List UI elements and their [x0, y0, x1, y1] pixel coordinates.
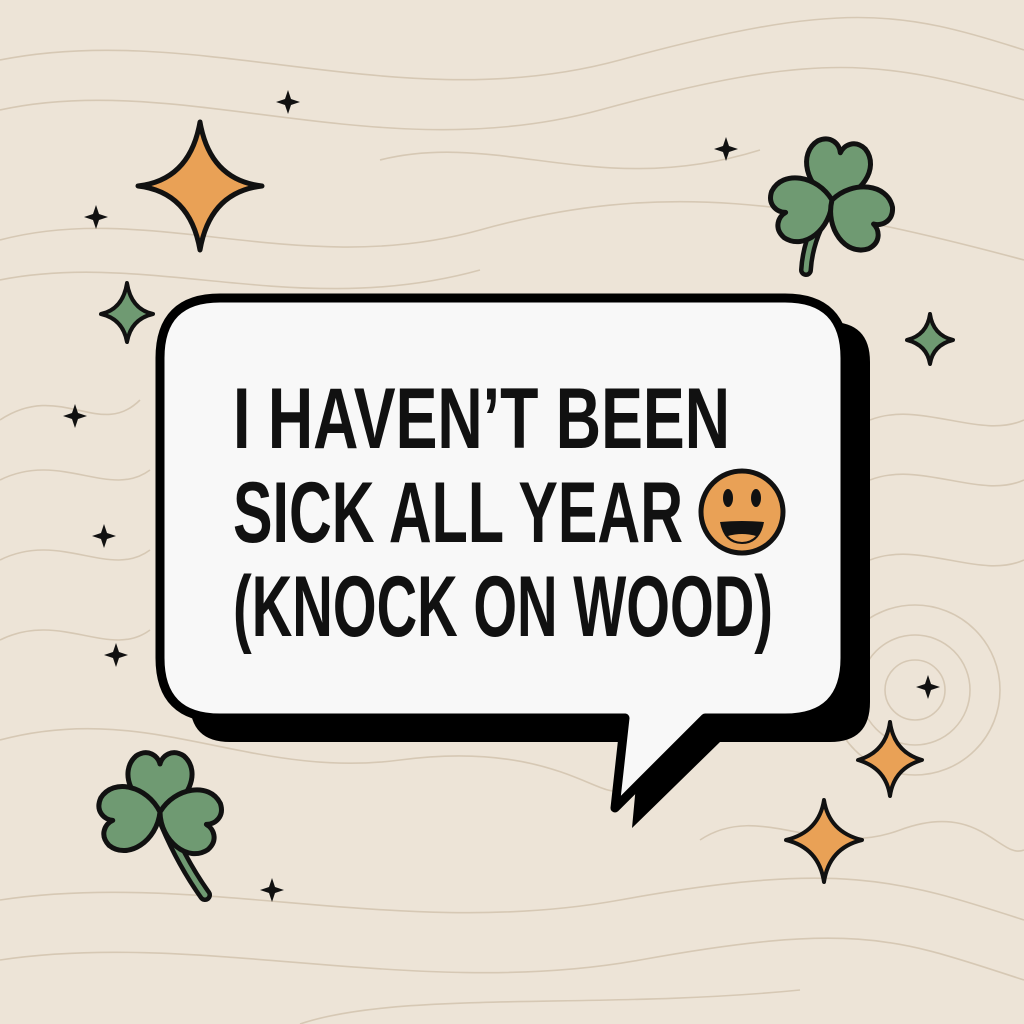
speech bubble: [160, 298, 870, 828]
icon: orange star top left: [138, 122, 262, 250]
icon: smiley emoji: [701, 471, 783, 553]
icon: orange star bottom right: [786, 800, 862, 882]
icon: green star right: [907, 314, 953, 364]
icon: orange star right: [858, 722, 922, 796]
text: main quote: I HAVEN’T BEEN: [233, 371, 730, 467]
icon: green star left: [101, 283, 153, 342]
clover: top right: [766, 136, 899, 270]
sparkles: [63, 90, 940, 902]
text: main quote: [233, 371, 773, 655]
clover: bottom left: [96, 753, 226, 895]
text: main quote: SICK ALL YEAR: [233, 465, 683, 561]
